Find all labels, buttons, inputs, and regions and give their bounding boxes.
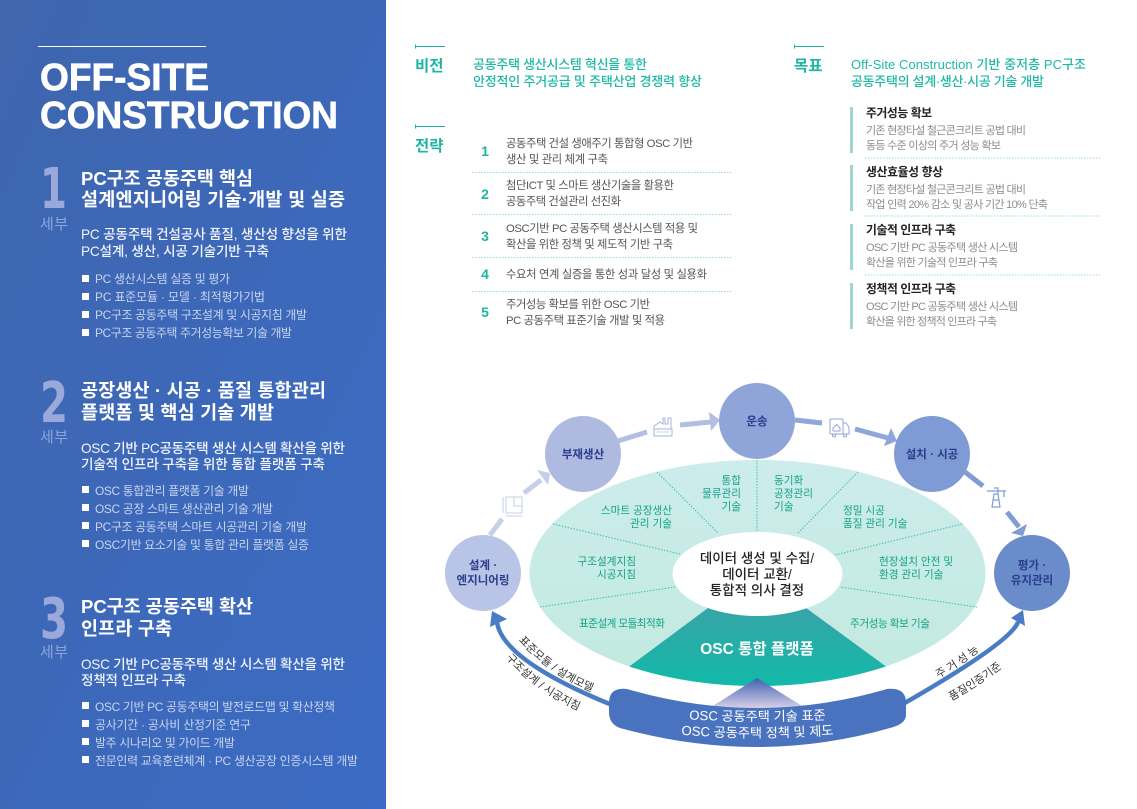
section 3: OSC 기반 PC 공동주택의 발전로드맵 및 확산정책 bbox=[95, 700, 335, 714]
section 1: 세부 bbox=[40, 216, 68, 233]
sector labels: 물류관리 bbox=[702, 488, 741, 500]
arrow: right feedback arc bbox=[903, 610, 1025, 704]
sector labels: 표준설계 모듈최적화 bbox=[579, 618, 665, 630]
goal item: 기술적 인프라 구축: 기술적 인프라 구축 bbox=[866, 223, 956, 237]
section 1: PC구조 공동주택 핵심 bbox=[81, 168, 253, 189]
section 1: 1 bbox=[40, 157, 67, 222]
section 2: 공장생산 · 시공 · 품질 통합관리 bbox=[81, 380, 326, 401]
title: OFF-SITE CONSTRUCTION: CONSTRUCTION bbox=[40, 95, 338, 137]
center text: 데이터 교환/ bbox=[722, 567, 792, 582]
goal item: 기술적 인프라 구축: 확산을 위한 기술적 인프라 구축 bbox=[866, 256, 998, 269]
stage: 평가·유지관리 bbox=[994, 535, 1070, 611]
center text: 통합적 의사 결정 bbox=[710, 583, 804, 598]
sector labels: 정밀 시공 bbox=[843, 505, 885, 517]
sector labels: 시공지침 bbox=[597, 569, 636, 581]
section 2: 2 bbox=[40, 371, 68, 436]
section 3: 발주 시나리오 및 가이드 개발 bbox=[95, 736, 235, 750]
sector labels: 기술 bbox=[774, 501, 794, 513]
panel: strategy: 확산을 위한 정책 및 제도적 기반 구축 bbox=[506, 237, 673, 251]
triangle connector bbox=[708, 678, 807, 709]
panel: goals: 목표 bbox=[794, 58, 823, 75]
sector dividers bbox=[540, 460, 977, 607]
sector labels: 관리 기술 bbox=[630, 518, 672, 530]
section 2: 플랫폼 및 핵심 기술 개발 bbox=[81, 402, 274, 423]
panel: vision bbox=[415, 44, 702, 89]
chart: central ellipse with sectors bbox=[530, 460, 986, 695]
chart: central ellipse with sectors: OSC 통합 플랫폼 bbox=[700, 640, 814, 658]
stage: 부재생산: 부재생산 bbox=[562, 447, 605, 461]
stage: 설계·엔지니어링: 엔지니어링 bbox=[457, 574, 509, 587]
section 3: OSC 기반 PC공동주택 생산 시스템 확산을 위한 bbox=[81, 657, 345, 672]
icon: blueprint bbox=[503, 497, 522, 516]
panel: strategy: 4 bbox=[481, 266, 489, 282]
section 1: 설계엔지니어링 기술·개발 및 실증 bbox=[81, 189, 345, 210]
sector labels: 통합 bbox=[722, 475, 741, 487]
sector labels bbox=[578, 475, 953, 630]
arc labels: 품질인증기준 bbox=[948, 662, 1002, 701]
goal item: 정책적 인프라 구축: 정책적 인프라 구축 bbox=[866, 282, 956, 296]
stage: 평가·유지관리: 평가 · bbox=[1018, 558, 1046, 572]
panel: left blue column bbox=[0, 0, 386, 809]
sector labels: 구조설계지침 bbox=[578, 556, 636, 568]
sector labels: 공정관리 bbox=[774, 488, 813, 500]
panel: strategy: 1 bbox=[481, 143, 489, 159]
section 2: 기술적 인프라 구축을 위한 통합 플랫폼 구축 bbox=[81, 457, 325, 472]
section 3: 전문인력 교육훈련체계 · PC 생산공장 인증시스템 개발 bbox=[95, 754, 358, 768]
panel: strategy: PC 공동주택 표준기술 개발 및 적용 bbox=[506, 314, 665, 327]
stage: 운송 bbox=[719, 383, 795, 459]
sector: OSC platform bbox=[630, 608, 886, 686]
icon: factory bbox=[654, 418, 672, 436]
section 3: 정책적 인프라 구축 bbox=[81, 673, 186, 688]
section 3: PC구조 공동주택 확산 bbox=[81, 596, 253, 617]
section 2: OSC 공장 스마트 생산관리 기술 개발 bbox=[95, 502, 273, 516]
goal item: 주거성능 확보: 기존 현장타설 철근콘크리트 공법 대비 bbox=[866, 124, 1026, 137]
goal item: 생산효율성 향상 bbox=[850, 165, 1048, 211]
goal item: 정책적 인프라 구축: 확산을 위한 정책적 인프라 구축 bbox=[866, 315, 997, 328]
panel: strategy: 첨단ICT 및 스마트 생산기술을 활용한 bbox=[506, 178, 674, 192]
panel: strategy: 생산 및 관리 체계 구축 bbox=[506, 153, 608, 166]
center text: 데이터 생성 및 수집/ bbox=[700, 551, 814, 566]
section 1: PC 생산시스템 실증 및 평가 bbox=[95, 272, 230, 286]
section 1: PC 공동주택 건설공사 품질, 생산성 향성을 위한 bbox=[81, 227, 347, 242]
section 3: 인프라 구축 bbox=[81, 618, 172, 639]
goal item: 생산효율성 향상: 작업 인력 20% 감소 및 공사 기간 10% 단축 bbox=[866, 198, 1048, 211]
stage: 운송: 운송 bbox=[746, 415, 768, 428]
section 2 bbox=[40, 371, 345, 552]
panel: strategy: 수요처 연계 실증을 통한 성과 달성 및 실용화 bbox=[506, 267, 708, 281]
panel: strategy: OSC기반 PC 공동주택 생산시스템 적용 및 bbox=[506, 222, 698, 235]
panel: goals: Off-Site Construction 기반 중저층 PC구조 bbox=[851, 57, 1086, 72]
goal item: 기술적 인프라 구축: OSC 기반 PC 공동주택 생산 시스템 bbox=[866, 241, 1018, 254]
sector labels: 품질 관리 기술 bbox=[843, 518, 908, 530]
stage: 설계·엔지니어링 bbox=[445, 535, 521, 611]
banner: OSC standards and policy: OSC 공동주택 기술 표준 bbox=[690, 709, 825, 722]
panel: vision: 안정적인 주거공급 및 주택산업 경쟁력 향상 bbox=[473, 74, 702, 89]
section 2: OSC 기반 PC공동주택 생산 시스템 확산을 위한 bbox=[81, 441, 345, 456]
panel: strategy: 공동주택 건설 생애주기 통합형 OSC 기반 bbox=[506, 137, 693, 150]
icon: tower crane bbox=[987, 488, 1006, 507]
panel: strategy: 주거성능 확보를 위한 OSC 기반 bbox=[506, 298, 650, 311]
section 1: PC구조 공동주택 주거성능확보 기술 개발 bbox=[95, 326, 292, 340]
title: OFF-SITE CONSTRUCTION: OFF-SITE bbox=[40, 57, 209, 99]
title: OFF-SITE CONSTRUCTION bbox=[40, 57, 338, 137]
stage: 부재생산 bbox=[545, 416, 621, 492]
panel: strategy: 5 bbox=[481, 304, 489, 320]
sector labels: 현장설치 안전 및 bbox=[879, 556, 953, 568]
sector labels: 환경 관리 기술 bbox=[879, 568, 944, 581]
section 1: PC설계, 생산, 시공 기술기반 구축 bbox=[81, 244, 269, 259]
arrow: left feedback arc bbox=[490, 611, 612, 705]
stage: 평가·유지관리: 유지관리 bbox=[1011, 574, 1053, 587]
arrows between stages bbox=[490, 412, 1027, 536]
goal item: 정책적 인프라 구축: OSC 기반 PC 공동주택 생산 시스템 bbox=[866, 300, 1018, 313]
stage: 설치·시공: 설치 · 시공 bbox=[906, 448, 959, 461]
arc labels: 주거성능 bbox=[935, 646, 978, 677]
goal item: 생산효율성 향상: 생산효율성 향상 bbox=[866, 165, 943, 179]
section 2: OSC기반 요소기술 및 통합 관리 플랫폼 실증 bbox=[95, 538, 309, 552]
panel: goals bbox=[794, 44, 1100, 329]
icon: truck bbox=[830, 419, 849, 437]
arc labels: 구조설계 / 시공지침 bbox=[508, 653, 581, 710]
sector labels: 기술 bbox=[722, 501, 741, 513]
stage: 설계·엔지니어링: 설계 · bbox=[469, 558, 497, 572]
goal item: 주거성능 확보: 동등 수준 이상의 주거 성능 확보 bbox=[866, 139, 1001, 152]
section 3: 공사기간 · 공사비 산정기준 연구 bbox=[95, 718, 251, 732]
section 1: PC구조 공동주택 구조설계 및 시공지침 개발 bbox=[95, 308, 307, 322]
section 1 bbox=[40, 157, 347, 340]
arc labels bbox=[508, 636, 1002, 710]
panel: strategy bbox=[415, 124, 733, 327]
panel: vision: 비전 bbox=[415, 57, 444, 75]
section 3 bbox=[40, 587, 358, 768]
section 3: 세부 bbox=[40, 644, 68, 661]
goal item: 주거성능 확보 bbox=[850, 106, 1026, 153]
sector labels: 주거성능 확보 기술 bbox=[850, 617, 930, 630]
section 2: PC구조 공동주택 스마트 시공관리 기술 개발 bbox=[95, 520, 307, 534]
arc labels: 표준모듈 / 설계모델 bbox=[519, 636, 594, 692]
center text bbox=[700, 551, 814, 598]
section 3: 3 bbox=[40, 587, 68, 652]
section 2: 세부 bbox=[40, 429, 68, 446]
panel: vision: 공동주택 생산시스템 혁신을 통한 bbox=[473, 57, 647, 72]
goal item: 생산효율성 향상: 기존 현장타설 철근콘크리트 공법 대비 bbox=[866, 183, 1026, 196]
goal item: 기술적 인프라 구축 bbox=[850, 223, 1018, 270]
sector labels: 동기화 bbox=[774, 475, 803, 487]
section 1: PC 표준모듈 · 모델 · 최적평가기법 bbox=[95, 290, 265, 304]
panel: strategy: 3 bbox=[481, 228, 489, 244]
stage: 설치·시공 bbox=[894, 416, 970, 492]
panel: strategy: 전략 bbox=[415, 137, 444, 155]
panel: strategy: 2 bbox=[481, 186, 489, 202]
banner: OSC standards and policy bbox=[609, 688, 906, 747]
goal item: 정책적 인프라 구축 bbox=[850, 282, 1018, 329]
diagram: OSC process cycle bbox=[445, 383, 1070, 747]
panel: strategy: 공동주택 건설관리 선진화 bbox=[506, 195, 622, 208]
section 2: OSC 통합관리 플랫폼 기술 개발 bbox=[95, 484, 249, 498]
panel: goals: 공동주택의 설계·생산·시공 기술 개발 bbox=[851, 74, 1044, 89]
goal item: 주거성능 확보: 주거성능 확보 bbox=[866, 106, 932, 120]
sector labels: 스마트 공장생산 bbox=[601, 505, 672, 517]
banner: OSC standards and policy: OSC 공동주택 정책 및 제도 bbox=[682, 724, 833, 738]
